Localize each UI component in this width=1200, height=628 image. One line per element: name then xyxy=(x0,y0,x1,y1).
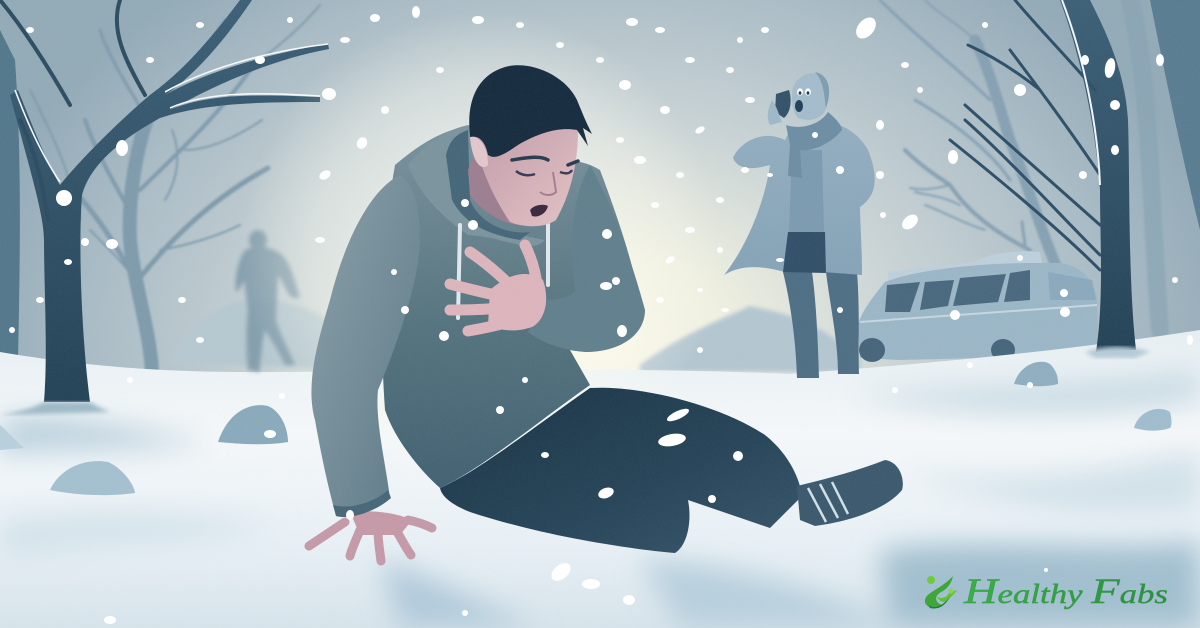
sweater xyxy=(789,150,824,232)
icon: leaf and person xyxy=(925,576,957,608)
trousers top xyxy=(783,232,826,273)
coat body xyxy=(724,124,875,275)
legs xyxy=(783,272,819,378)
right arm sleeve xyxy=(528,165,645,352)
background: pale distant tree, right xyxy=(880,0,1160,330)
van xyxy=(858,251,1098,362)
background figure running xyxy=(235,230,300,372)
hood xyxy=(408,125,545,246)
left dark tree xyxy=(0,0,329,415)
snow mounds xyxy=(0,362,1172,495)
background: pale distant trees, left xyxy=(30,5,320,372)
planted hand xyxy=(309,511,432,561)
sleeve cuff xyxy=(333,490,391,517)
man on phone xyxy=(724,72,875,378)
snow ground shading xyxy=(0,370,1200,628)
ear xyxy=(470,137,488,167)
left edge tree trunk xyxy=(0,30,20,360)
shoe xyxy=(797,460,903,526)
scarf xyxy=(786,112,842,178)
right edge tree trunk xyxy=(1150,0,1200,230)
head xyxy=(792,73,828,120)
logo: Healthy Fabs xyxy=(925,571,1168,611)
neck xyxy=(468,140,530,225)
background: distant hills xyxy=(170,299,860,372)
hair xyxy=(469,65,592,157)
main figure: man clutching his chest xyxy=(309,65,903,561)
right dark tree xyxy=(950,0,1150,358)
drawstrings xyxy=(458,218,548,318)
snow ground xyxy=(0,330,1200,628)
hand on chest xyxy=(450,245,546,331)
main figure glow xyxy=(240,10,720,490)
legs xyxy=(440,388,802,553)
left arm xyxy=(311,175,420,516)
torso xyxy=(382,125,640,488)
nose and mouth xyxy=(540,172,556,195)
eyes and brows xyxy=(512,157,578,165)
phone and hand xyxy=(775,90,791,118)
wordmark: H ealthy Fabs xyxy=(963,571,1168,611)
face xyxy=(472,120,578,226)
